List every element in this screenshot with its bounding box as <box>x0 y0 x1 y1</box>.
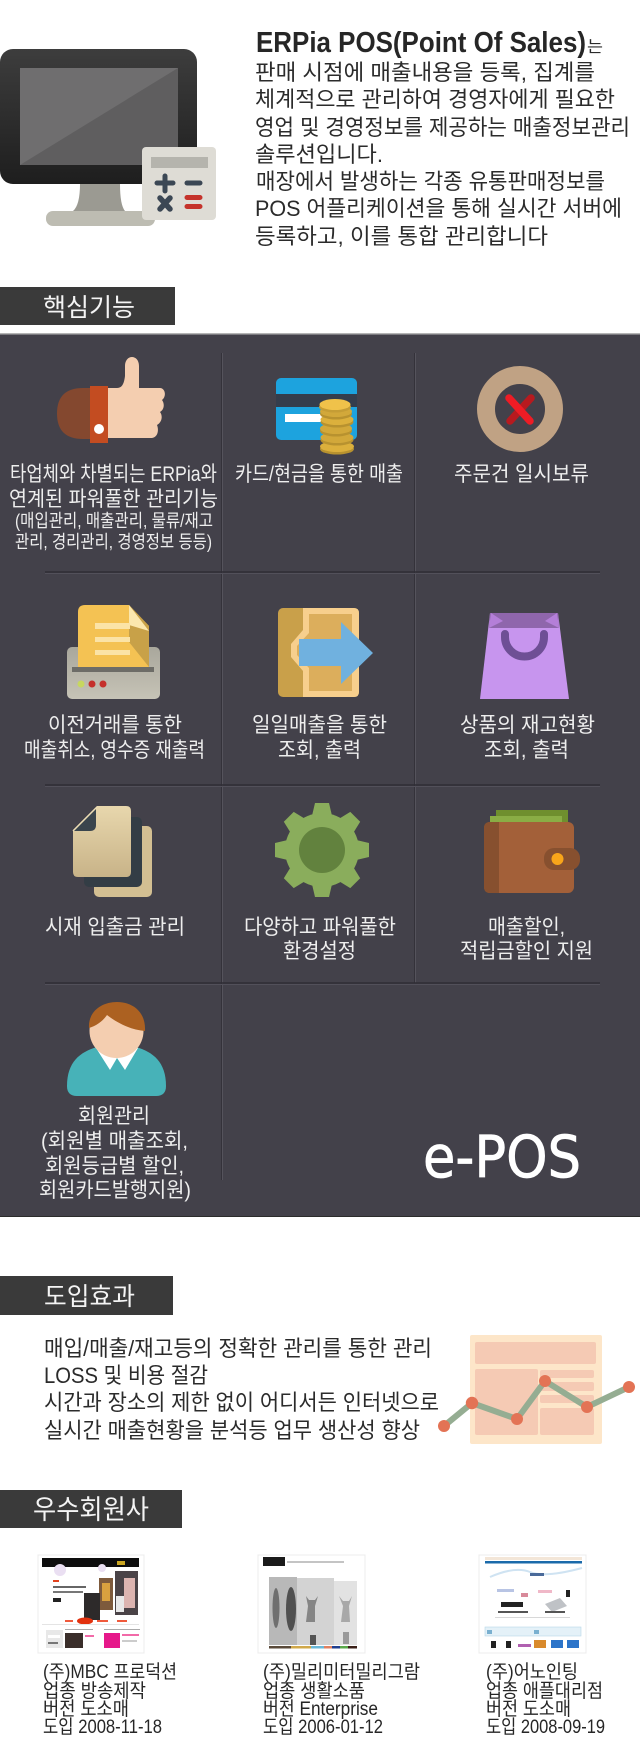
label: 다양하고 파워풀한 <box>244 916 396 939</box>
label: 적립금할인 지원 <box>460 940 593 963</box>
benefits text block: 매입/매출/재고등의 정확한 관리를 통한 관리 <box>44 1336 432 1361</box>
label: (매입관리, 매출관리, 물류/재고 <box>15 511 213 531</box>
icon: shopping bag <box>480 613 569 699</box>
label: 일일매출을 통한 <box>252 714 387 737</box>
heading: 도입효과: 도입효과 <box>44 1283 135 1311</box>
label <box>252 714 387 762</box>
intro text block: 판매 시점에 매출내용을 등록, 집계를 <box>255 60 595 85</box>
company details: 버전 도소매 <box>486 1698 571 1720</box>
company details: 도입 2008-11-18 <box>43 1716 162 1738</box>
company details <box>486 1661 605 1738</box>
benefits text block: LOSS 및 비용 절감 <box>44 1363 208 1388</box>
icon: person <box>67 1002 166 1096</box>
icon: monitor with calculator <box>0 49 216 226</box>
label: 주문건 일시보류 <box>454 463 589 486</box>
icon: gear <box>275 803 369 897</box>
icon: documents <box>73 806 152 897</box>
icon: wallet <box>484 810 580 893</box>
company details <box>43 1661 177 1738</box>
label: 시재 입출금 관리 <box>45 916 185 939</box>
company details: 도입 2006-01-12 <box>263 1716 383 1738</box>
intro text block: 는 <box>587 38 603 56</box>
feature: settings <box>244 803 396 963</box>
label: 조회, 출력 <box>278 739 361 762</box>
heading: 도입효과 <box>0 1276 173 1315</box>
label: 이전거래를 통한 <box>48 714 182 737</box>
label: 연계된 파워풀한 관리기능 <box>9 488 218 511</box>
company details: 업종 생활소품 <box>263 1680 365 1702</box>
benefits text block: 실시간 매출현황을 분석등 업무 생산성 향상 <box>44 1418 420 1443</box>
intro text block: POS 어플리케이션을 통해 실시간 서버에 <box>255 196 622 221</box>
thumbnail: Enointing site <box>479 1555 586 1653</box>
benefits text block <box>44 1336 439 1443</box>
intro text block: 매장에서 발생하는 각종 유통판매정보를 <box>256 169 605 194</box>
icon: cancel ring <box>486 375 554 443</box>
label: (회원별 매출조회, <box>41 1130 188 1153</box>
label <box>9 463 218 552</box>
label: 매출취소, 영수증 재출력 <box>24 739 205 762</box>
intro text block: 솔루션입니다. <box>255 142 383 167</box>
company details: 업종 방송제작 <box>43 1680 146 1702</box>
company details: (주)어노인팅 <box>486 1661 578 1683</box>
chart illustration <box>438 1335 635 1444</box>
intro text block: ERPia POS(Point Of Sales) <box>256 27 586 59</box>
intro text block: 등록하고, 이를 통합 관리합니다 <box>255 224 548 249</box>
member: Millimeter Milligram <box>258 1555 420 1738</box>
label: 타업체와 차별되는 ERPia와 <box>10 463 217 486</box>
feature: inventory <box>460 613 595 762</box>
logo text: e-POS: e-POS <box>423 1123 581 1191</box>
company details: 버전 Enterprise <box>263 1698 378 1720</box>
intro text block: 영업 및 경영정보를 제공하는 매출정보관리 <box>255 115 630 140</box>
label: 매출할인, <box>488 916 565 939</box>
label: 조회, 출력 <box>484 739 569 762</box>
label: 회원등급별 할인, <box>45 1155 184 1178</box>
label <box>460 916 593 963</box>
company details <box>263 1661 420 1738</box>
label <box>244 916 396 963</box>
icon: thumbs up <box>57 357 165 443</box>
thumbnail: MBC site <box>38 1555 144 1653</box>
company details: 도입 2008-09-19 <box>486 1716 605 1738</box>
label: 회원관리 <box>78 1105 150 1128</box>
feature: card and cash <box>235 378 403 486</box>
intro text block <box>255 27 630 249</box>
label: 환경설정 <box>283 940 356 963</box>
label <box>24 714 205 762</box>
label <box>39 1105 191 1202</box>
label <box>460 714 595 762</box>
company details: (주)MBC 프로덕션 <box>43 1661 177 1683</box>
heading: 우수회원사 <box>0 1490 182 1528</box>
member: MBC <box>38 1555 177 1738</box>
feature: order hold <box>454 375 589 486</box>
heading: 핵심기능: 핵심기능 <box>43 294 135 322</box>
company details: 버전 도소매 <box>43 1698 129 1720</box>
icon: card and coins <box>276 378 357 454</box>
label: 회원카드발행지원) <box>39 1179 191 1202</box>
feature: discounts <box>460 810 593 963</box>
icon: receipt printer <box>67 605 160 699</box>
feature: members <box>39 1002 191 1202</box>
feature: cash management <box>45 806 185 939</box>
feature: management <box>9 357 218 552</box>
heading: 우수회원사: 우수회원사 <box>33 1495 149 1525</box>
heading: 핵심기능 <box>0 287 175 325</box>
feature: daily sales <box>252 608 387 762</box>
icon: folder with arrow <box>278 608 373 697</box>
label: 상품의 재고현황 <box>460 714 595 737</box>
panel: key features <box>0 333 640 1217</box>
feature: previous transactions <box>24 605 205 762</box>
company details: 업종 애플대리점 <box>486 1680 603 1702</box>
thumbnail: Millimeter Milligram site <box>258 1555 365 1653</box>
label: 관리, 경리관리, 경영정보 등등) <box>15 532 212 552</box>
member: Enointing <box>479 1555 605 1738</box>
label: 카드/현금을 통한 매출 <box>235 463 403 486</box>
company details: (주)밀리미터밀리그람 <box>263 1661 420 1683</box>
benefits text block: 시간과 장소의 제한 없이 어디서든 인터넷으로 <box>44 1390 439 1415</box>
intro text block: 체계적으로 관리하여 경영자에게 필요한 <box>255 87 615 112</box>
